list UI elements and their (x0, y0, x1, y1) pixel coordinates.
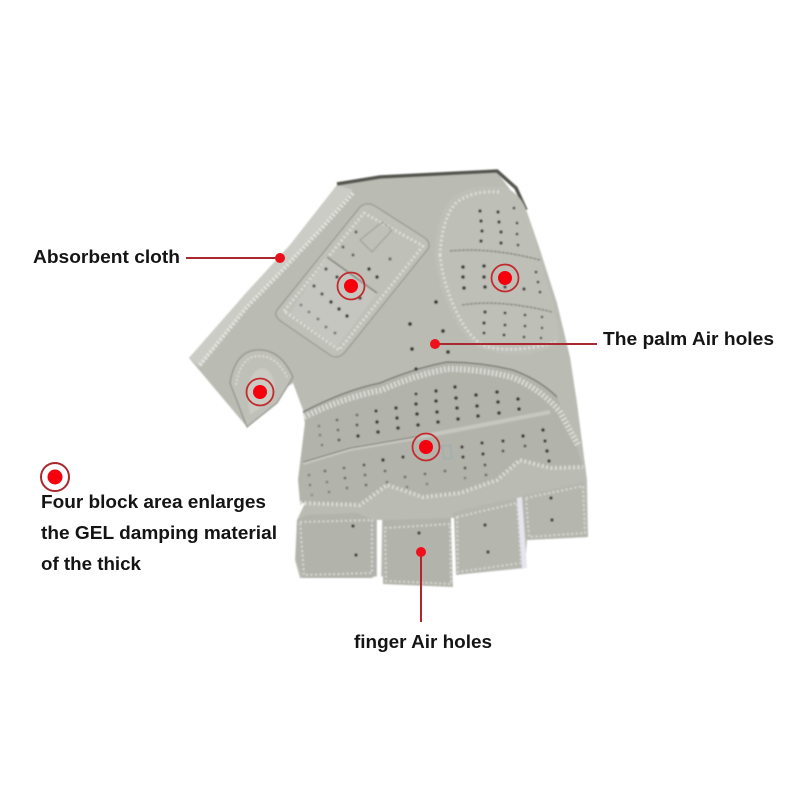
gel marker: left pad (338, 272, 364, 300)
right gel pad (435, 186, 560, 356)
label: palm air holes: The palm Air holes (603, 329, 774, 349)
lower palm pad (298, 362, 583, 505)
callout: absorbent cloth pointer (186, 253, 285, 263)
glove illustration (189, 171, 588, 587)
glove palm body (189, 172, 588, 578)
finger stub 2 (383, 518, 453, 587)
legend icon: gel marker (41, 463, 69, 491)
thumb pad (230, 350, 293, 427)
legend text: gel description (41, 492, 277, 574)
legend text: gel description: the GEL damping material (41, 523, 277, 543)
label: finger air holes: finger Air holes (354, 632, 492, 652)
label: absorbent cloth: Absorbent cloth (33, 247, 180, 267)
callout: palm air holes pointer (430, 339, 597, 349)
left gel pad (276, 204, 429, 357)
legend text: gel description: of the thick (41, 554, 142, 574)
finger stub 4 (521, 482, 588, 540)
finger stub 3 (453, 498, 525, 575)
gel marker: lower pad (412, 434, 440, 460)
finger stubs (296, 482, 588, 587)
callout: finger air holes pointer (416, 547, 426, 622)
legend text: gel description: Four block area enlarges (41, 492, 266, 512)
cloth stitching (200, 193, 353, 365)
gel marker: right pad (492, 264, 518, 292)
finger stub 1 (296, 513, 376, 578)
absorbent cloth strip (189, 185, 353, 367)
gel marker: thumb (246, 378, 274, 406)
air holes (300, 207, 554, 557)
top cuff band (337, 171, 526, 210)
